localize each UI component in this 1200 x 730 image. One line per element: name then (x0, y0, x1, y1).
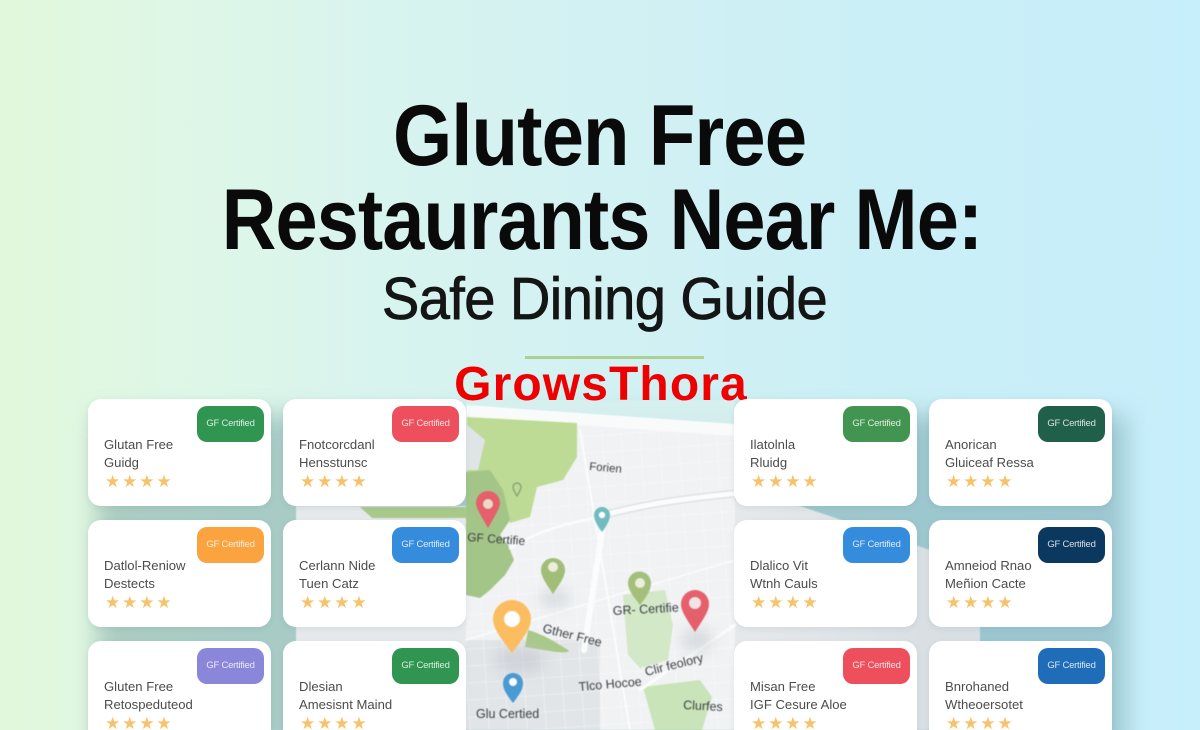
card: row 2 column 3: Dlalico Vit (750, 558, 808, 573)
card: row 1 column 2: GF Certified (401, 418, 450, 429)
card: row 3 column 1: Retospeduteod (104, 697, 193, 712)
card: row 1 column 3: ★★★★ (751, 472, 820, 492)
card: row 3 column 3: GF Certified (852, 660, 901, 671)
map pin: red left (476, 491, 500, 528)
map pin: teal (594, 507, 610, 532)
card: row 3 column 4 (929, 641, 1112, 730)
card: row 2 column 2: Tuen Catz (299, 576, 359, 591)
card: row 2 column 4: Meñion Cacte (945, 576, 1026, 591)
card: row 1 column 3: Rluidg (750, 455, 787, 470)
map label: Ctrfies: Clurfes (683, 698, 723, 714)
card: row 2 column 2 (283, 520, 466, 627)
card: row 1 column 3 (734, 399, 917, 506)
card: row 3 column 3: Misan Free (750, 679, 816, 694)
map labels (467, 461, 723, 721)
brand watermark: GrowsThora (454, 358, 748, 411)
card: row 3 column 3 (734, 641, 917, 730)
card: row 1 column 1: Glutan Free (104, 437, 173, 452)
card: row 1 column 4: GF Certified (1047, 418, 1096, 429)
card: row 2 column 3: ★★★★ (751, 593, 820, 613)
card: row 3 column 2: GF Certified (401, 660, 450, 671)
map pin: small green outline (513, 483, 521, 496)
heading divider (525, 356, 704, 359)
map label: GF Certified centre: GR- Certifie (612, 601, 679, 618)
card: row 2 column 4: GF Certified (1047, 539, 1096, 550)
card: row 1 column 1: Guidg (104, 455, 139, 470)
map pin: green right (628, 572, 651, 605)
map roads (466, 430, 740, 730)
card: row 2 column 2: ★★★★ (300, 593, 369, 613)
green park areas (360, 417, 712, 730)
card: row 3 column 4: Bnrohaned (945, 679, 1009, 694)
card: row 1 column 4: Gluiceaf Ressa (945, 455, 1034, 470)
card: row 3 column 4: Wtheoersotet (945, 697, 1023, 712)
card: row 2 column 1: Destects (104, 576, 155, 591)
card: row 2 column 4: ★★★★ (946, 593, 1015, 613)
title: Restaurants Near Me: Restaurants Near Me: (222, 172, 982, 268)
map pin: red right (681, 590, 709, 632)
card: row 1 column 4: ★★★★ (946, 472, 1015, 492)
map label: Gluten Free: Gther Free (541, 621, 603, 650)
card: row 1 column 2: Hensstunsc (299, 455, 367, 470)
card: row 2 column 1: GF Certified (206, 539, 255, 550)
card: row 1 column 2 (283, 399, 466, 506)
map pin: green centre (541, 558, 565, 594)
pin shadows (494, 589, 713, 674)
card: row 2 column 1: ★★★★ (105, 593, 174, 613)
card: row 3 column 1 (88, 641, 271, 730)
subtitle: Safe Dining Guide (382, 266, 827, 332)
card: row 2 column 1: Datlol-Reniow (104, 558, 186, 573)
card: row 3 column 2: Amesisnt Maind (299, 697, 392, 712)
card: row 2 column 1 (88, 520, 271, 627)
card: row 3 column 3: IGF Cesure Aloe (750, 697, 847, 712)
card: row 1 column 1 (88, 399, 271, 506)
card: row 1 column 3: Ilatolnla (750, 437, 795, 452)
soft backdrop shadow behind cards (96, 415, 1126, 730)
card: row 1 column 4: Anorican (945, 437, 997, 452)
card: row 3 column 4: GF Certified (1047, 660, 1096, 671)
card: row 2 column 3: GF Certified (852, 539, 901, 550)
card: row 3 column 1: GF Certified (206, 660, 255, 671)
map label: Tico Hocoe: Tlco Hocoe (578, 675, 642, 694)
card: row 1 column 2: ★★★★ (300, 472, 369, 492)
card: row 3 column 1: Gluten Free (104, 679, 173, 694)
map label: Clir feology: Clir feolory (643, 651, 705, 679)
card: row 1 column 1: ★★★★ (105, 472, 174, 492)
card: row 1 column 2: Fnotcorcdanl (299, 437, 375, 452)
map label: Glu Certied: Glu Certied (476, 707, 539, 721)
card: row 1 column 4 (929, 399, 1112, 506)
map pin: orange large (493, 600, 531, 653)
map pin: blue (503, 673, 523, 703)
card: row 2 column 3: Wtnh Cauls (750, 576, 818, 591)
card: row 3 column 2 (283, 641, 466, 730)
card: row 1 column 1: GF Certified (206, 418, 255, 429)
map label: Foren: Forien (589, 461, 622, 476)
card: row 2 column 4: Amneiod Rnao (945, 558, 1032, 573)
card: row 1 column 3: GF Certified (852, 418, 901, 429)
card: row 3 column 2: Dlesian (299, 679, 343, 694)
card: row 2 column 2: Cerlann Nide (299, 558, 375, 573)
card: row 2 column 2: GF Certified (401, 539, 450, 550)
title: Gluten Free: Gluten Free (393, 88, 806, 184)
map label: GF Certified left: GF Certifie (467, 530, 526, 548)
card: row 2 column 3 (734, 520, 917, 627)
card: row 2 column 4 (929, 520, 1112, 627)
